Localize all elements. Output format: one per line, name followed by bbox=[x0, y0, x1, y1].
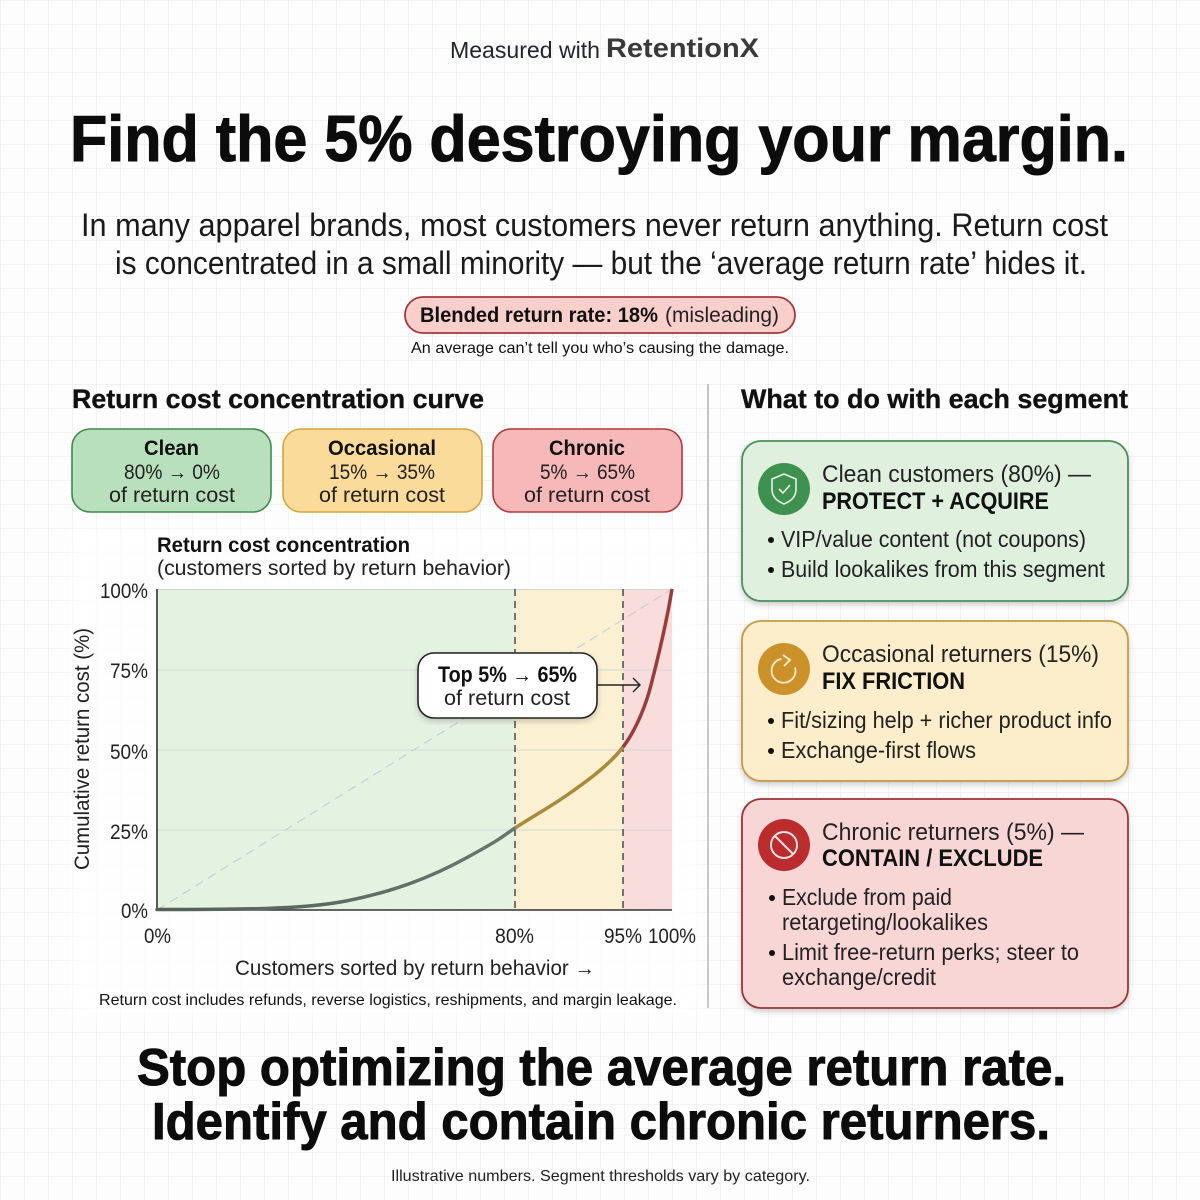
footnote: Illustrative numbers. Segment thresholds vary by category. bbox=[391, 1168, 810, 1185]
chart title: Return cost concentration bbox=[157, 534, 410, 557]
x axis labels: 0% bbox=[144, 925, 171, 948]
header: measured with RetentionX bbox=[450, 33, 759, 63]
y axis labels: 75% bbox=[110, 660, 148, 683]
callout pill: blended return rate bbox=[405, 297, 795, 333]
x axis title: Customers sorted by return behavior → bbox=[235, 957, 595, 980]
chip: clean: Clean bbox=[144, 437, 199, 460]
y axis labels: 0% bbox=[121, 900, 148, 923]
bullet list: retargeting/lookalikes bbox=[782, 909, 988, 935]
x axis labels bbox=[144, 925, 696, 948]
bullet list: Exchange-first flows bbox=[781, 737, 976, 763]
chip: clean: 80% → 0% bbox=[124, 461, 220, 484]
icon: prohibited bbox=[758, 819, 810, 871]
bullet list: Fit/sizing help + richer product info bbox=[781, 707, 1112, 733]
bullet list: Limit free-return perks; steer to bbox=[782, 939, 1079, 965]
bullet list bbox=[769, 884, 1079, 990]
plot bands bbox=[157, 589, 672, 910]
panel: occasional returners bbox=[742, 621, 1128, 781]
chip: occasional: Occasional bbox=[328, 437, 436, 460]
bullet list bbox=[768, 707, 1112, 763]
curve: chronic segment bbox=[623, 589, 672, 747]
chart panel: return cost concentration bbox=[71, 530, 700, 1015]
closing statement bbox=[137, 1039, 1066, 1151]
arrow: callout to curve bbox=[597, 678, 640, 692]
callout: top 5 percent: Top 5% → 65% bbox=[438, 662, 577, 687]
reference diagonal bbox=[157, 589, 672, 910]
panel: clean customers bbox=[742, 441, 1128, 601]
panel: chronic returners bbox=[742, 799, 1128, 1008]
card heading: PROTECT + ACQUIRE bbox=[822, 488, 1049, 515]
chip: occasional: of return cost bbox=[319, 484, 445, 507]
icon: shield check bbox=[758, 463, 810, 515]
subtitle: In many apparel brands, most customers never return anything. Return cost bbox=[81, 207, 1108, 243]
y axis labels: 50% bbox=[110, 741, 148, 764]
bullet list: Build lookalikes from this segment bbox=[781, 556, 1106, 582]
header: measured with RetentionX: Measured with bbox=[450, 37, 600, 63]
chip: clean: of return cost bbox=[109, 484, 235, 507]
callout pill: blended return rate: (misleading) bbox=[665, 304, 779, 327]
chip: occasional: 15% → 35% bbox=[329, 461, 435, 484]
bullet list: Exclude from paid bbox=[782, 884, 952, 910]
chip: chronic: 5% → 65% bbox=[540, 461, 635, 484]
bullet list bbox=[768, 526, 1106, 582]
bullet list: exchange/credit bbox=[782, 964, 937, 990]
x axis labels: 100% bbox=[648, 925, 696, 948]
y axis labels bbox=[100, 580, 148, 923]
bullet list: VIP/value content (not coupons) bbox=[781, 526, 1086, 552]
title: Find the 5% destroying your margin. bbox=[70, 102, 1128, 175]
chip: chronic: Chronic bbox=[549, 437, 625, 460]
callout: top 5 percent bbox=[418, 653, 597, 718]
heading: right column: What to do with each segment bbox=[741, 384, 1128, 414]
y axis labels: 25% bbox=[110, 821, 148, 844]
closing statement: Stop optimizing the average return rate. bbox=[137, 1039, 1066, 1097]
card heading: FIX FRICTION bbox=[822, 668, 965, 695]
heading: left column: Return cost concentration curve bbox=[72, 384, 484, 414]
chip: chronic: of return cost bbox=[524, 484, 650, 507]
card heading bbox=[822, 461, 1091, 515]
curve: clean segment bbox=[157, 828, 515, 910]
card heading: Chronic returners (5%) — bbox=[822, 819, 1084, 846]
pill caption: An average can’t tell you who’s causing the damage. bbox=[411, 340, 789, 357]
closing statement: Identify and contain chronic returners. bbox=[152, 1093, 1050, 1151]
subtitle bbox=[81, 207, 1108, 281]
chart footnote: Return cost includes refunds, reverse logistics, reshipments, and margin leakage. bbox=[99, 992, 677, 1009]
y axis title: Cumulative return cost (%) bbox=[71, 628, 94, 870]
card heading bbox=[822, 819, 1084, 872]
chip: clean bbox=[72, 429, 271, 512]
callout pill: blended return rate: Blended return rate: 18% bbox=[420, 304, 658, 327]
x axis labels: 80% bbox=[495, 925, 534, 948]
card heading: Occasional returners (15%) bbox=[822, 641, 1099, 668]
chart title bbox=[157, 534, 511, 580]
curve: occasional segment bbox=[515, 747, 623, 828]
chip: occasional bbox=[283, 429, 482, 512]
y axis labels: 100% bbox=[100, 580, 148, 603]
icon: refresh bbox=[758, 643, 810, 695]
card heading bbox=[822, 641, 1099, 695]
chart title: (customers sorted by return behavior) bbox=[157, 557, 511, 580]
x axis labels: 95% bbox=[604, 925, 642, 948]
header: measured with RetentionX: RetentionX bbox=[606, 33, 759, 63]
callout: top 5 percent: of return cost bbox=[444, 687, 570, 710]
card heading: CONTAIN / EXCLUDE bbox=[822, 845, 1043, 872]
chip: chronic bbox=[493, 429, 682, 512]
card heading: Clean customers (80%) — bbox=[822, 461, 1091, 488]
subtitle: is concentrated in a small minority — but the ‘average return rate’ hides it. bbox=[115, 245, 1087, 281]
